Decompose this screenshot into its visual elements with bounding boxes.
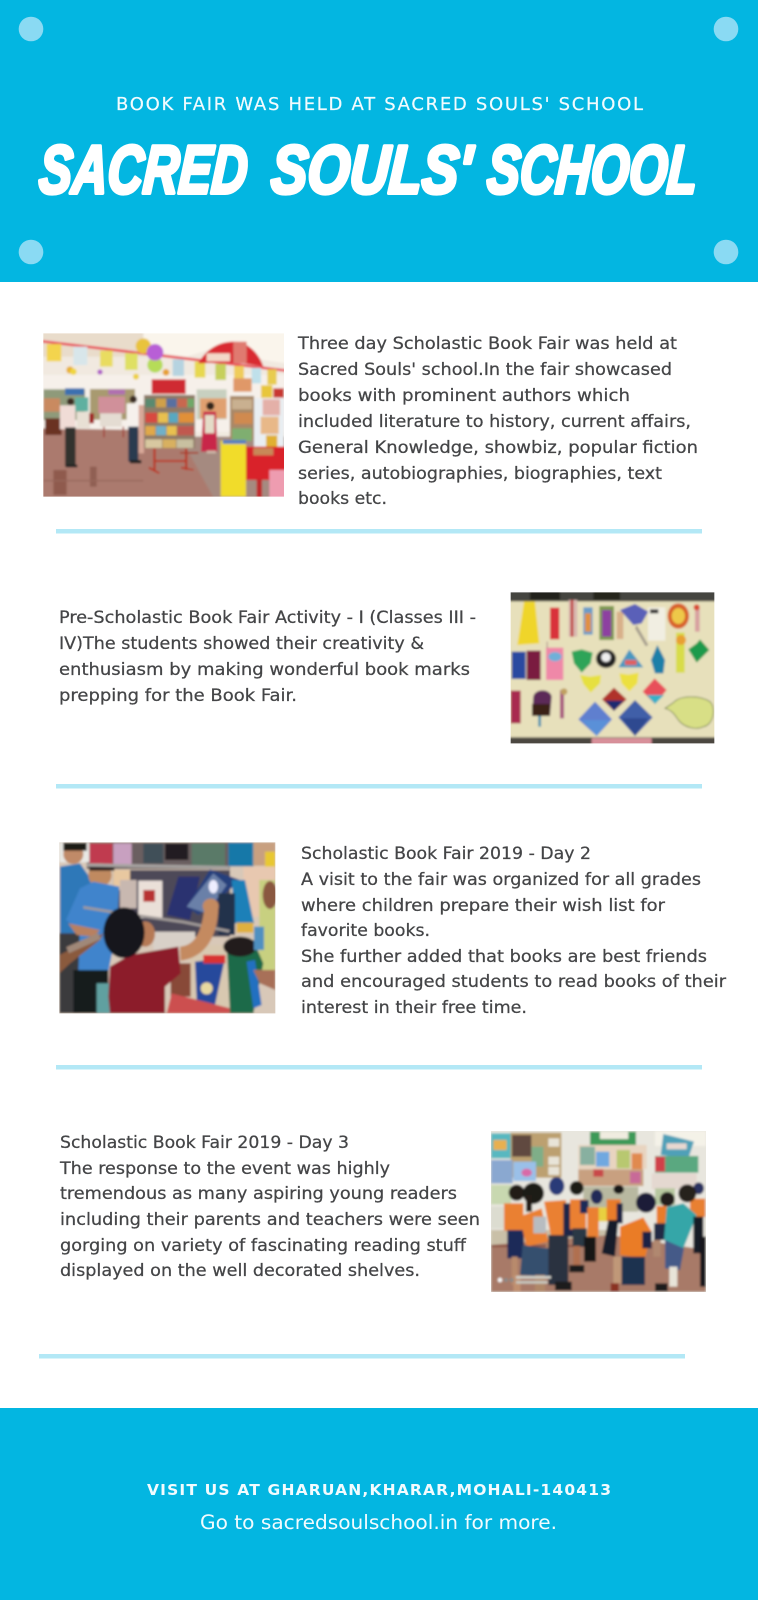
text block: activity description: Pre-Scholastic Book Fair Activity - I (Classes III -	[59, 608, 476, 628]
text block: day 3 description	[59, 1133, 480, 1281]
text block: activity description: prepping for the Book Fair.	[59, 686, 297, 706]
text block: activity description: IV)The students showed their creativity &	[59, 634, 424, 654]
text block: day 3 description: The response to the event was highly	[59, 1159, 390, 1179]
text block: day 2 description	[301, 844, 726, 1018]
photo: handmade book marks	[510, 592, 714, 744]
text block: day 3 description: displayed on the well decorated shelves.	[60, 1261, 420, 1281]
footer address: VISIT US AT GHARUAN,KHARAR,MOHALI-140413	[147, 1481, 611, 1499]
text block: day 3 description: gorging on variety of fascinating reading stuff	[60, 1236, 467, 1256]
text block: fair description: included literature to history, current affairs,	[298, 412, 691, 432]
text block: day 3 description: Scholastic Book Fair 2019 - Day 3	[60, 1133, 349, 1153]
text block: fair description	[297, 334, 698, 509]
text block: day 2 description: interest in their free time.	[301, 998, 527, 1018]
footer banner	[0, 1408, 758, 1600]
text block: day 2 description: A visit to the fair was organized for all grades	[301, 870, 701, 890]
text block: day 2 description: favorite books.	[301, 921, 430, 941]
text block: day 2 description: and encouraged students to read books of their	[301, 972, 726, 992]
text block: fair description: books etc.	[298, 489, 387, 509]
text block: fair description: books with prominent authors which	[298, 386, 630, 406]
decorative dots	[19, 17, 738, 264]
photo: children choosing books	[53, 837, 280, 1018]
text block: day 3 description: including their parents and teachers were seen	[60, 1210, 480, 1230]
text block: day 3 description: tremendous as many aspiring young readers	[60, 1184, 457, 1204]
panel: day 2	[53, 837, 726, 1018]
text block: fair description: Sacred Souls' school.In the fair showcased	[298, 360, 672, 380]
panel: day 3	[59, 1123, 713, 1297]
photo: students in orange vests	[491, 1131, 706, 1292]
title	[37, 132, 700, 208]
title: SACRED	[37, 132, 250, 208]
text block: activity description: enthusiasm by making wonderful book marks	[59, 660, 470, 680]
title: SOULS'	[269, 132, 476, 208]
panel: book marks activity	[59, 587, 720, 747]
text block: day 2 description: where children prepare their wish list for	[301, 896, 665, 916]
footer website line: Go to sacredsoulschool.in for more.	[200, 1511, 557, 1534]
text block: day 2 description: She further added that books are best friends	[301, 947, 707, 967]
text block: day 2 description: Scholastic Book Fair 2019 - Day 2	[301, 844, 591, 864]
text block: fair description: General Knowledge, showbiz, popular fiction	[298, 438, 698, 458]
panel: three day book fair	[37, 327, 698, 509]
header banner	[0, 0, 758, 282]
text block: fair description: Three day Scholastic Book Fair was held at	[297, 334, 677, 354]
text block: activity description	[59, 608, 476, 706]
photo: book fair hall	[43, 333, 284, 497]
subtitle: BOOK FAIR WAS HELD AT SACRED SOULS' SCHOOL	[116, 94, 643, 115]
text block: fair description: series, autobiographies, biographies, text	[298, 464, 662, 484]
